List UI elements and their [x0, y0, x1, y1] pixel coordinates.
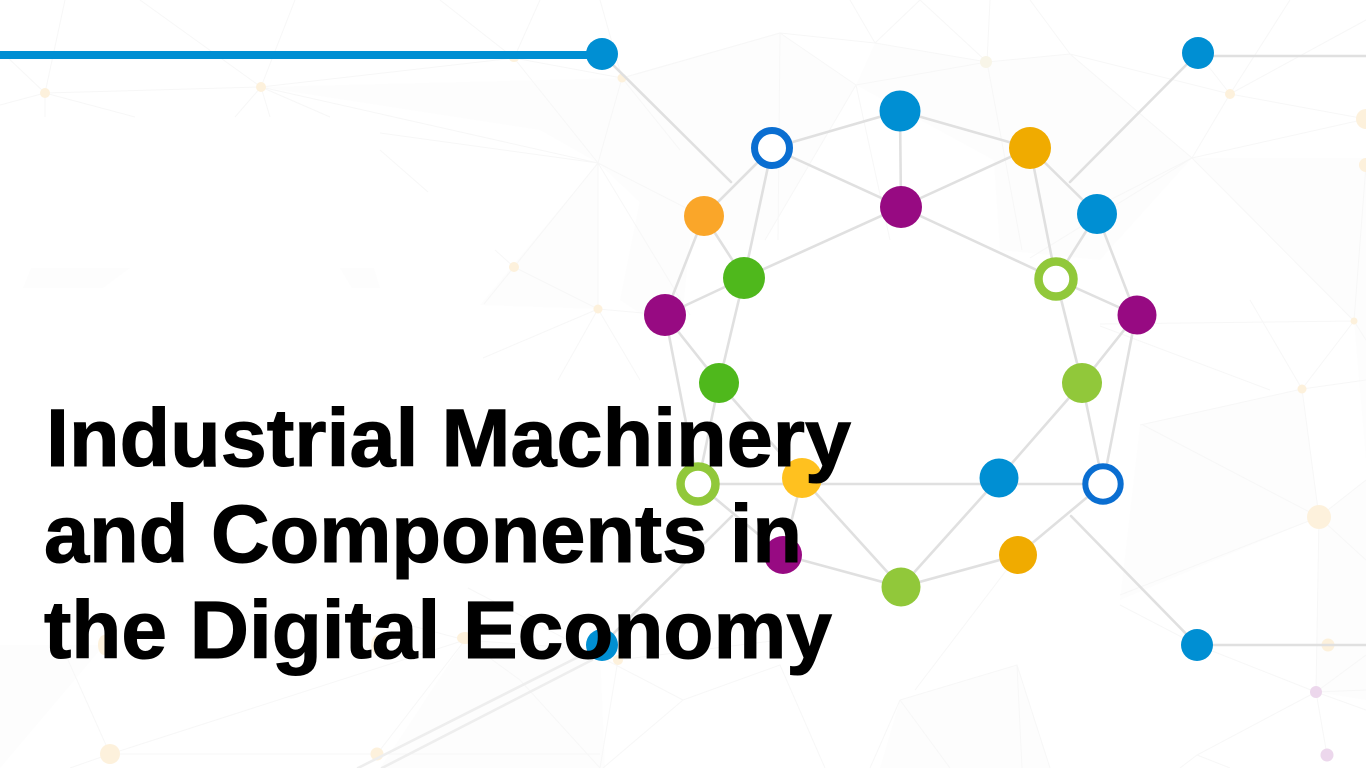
node: top blue — [880, 90, 920, 132]
node: bottom-right blue — [1181, 629, 1213, 661]
node: orange — [684, 196, 724, 236]
node: blue ring lower right — [1085, 466, 1121, 502]
title: Industrial Machinery — [46, 393, 851, 484]
node: light green ring lower left — [680, 466, 716, 502]
node: light green right — [1062, 363, 1102, 403]
node: yellow — [782, 458, 822, 498]
node: purple left — [644, 294, 686, 336]
network connector lines — [358, 53, 1366, 768]
node: blue lower right — [980, 458, 1018, 498]
node: light green bottom — [882, 568, 920, 606]
node: purple bottom left — [764, 536, 802, 574]
node: blue ring upper left — [754, 130, 790, 166]
blue header rule — [0, 51, 590, 59]
node: green lower left — [699, 363, 739, 403]
node: top-right blue — [1182, 37, 1214, 69]
node: light green ring right — [1038, 262, 1074, 296]
node: amber bottom right — [999, 536, 1037, 574]
node: green left — [723, 257, 765, 299]
title: and Components in — [44, 489, 802, 580]
node: amber upper right — [1009, 127, 1051, 169]
title — [44, 393, 851, 676]
node: purple right — [1118, 296, 1156, 334]
node: bottom-left blue — [586, 629, 618, 661]
node: blue right — [1077, 194, 1117, 234]
title: the Digital Economy — [44, 585, 832, 676]
node: purple centre — [880, 186, 922, 228]
node: top-left blue — [586, 38, 618, 70]
